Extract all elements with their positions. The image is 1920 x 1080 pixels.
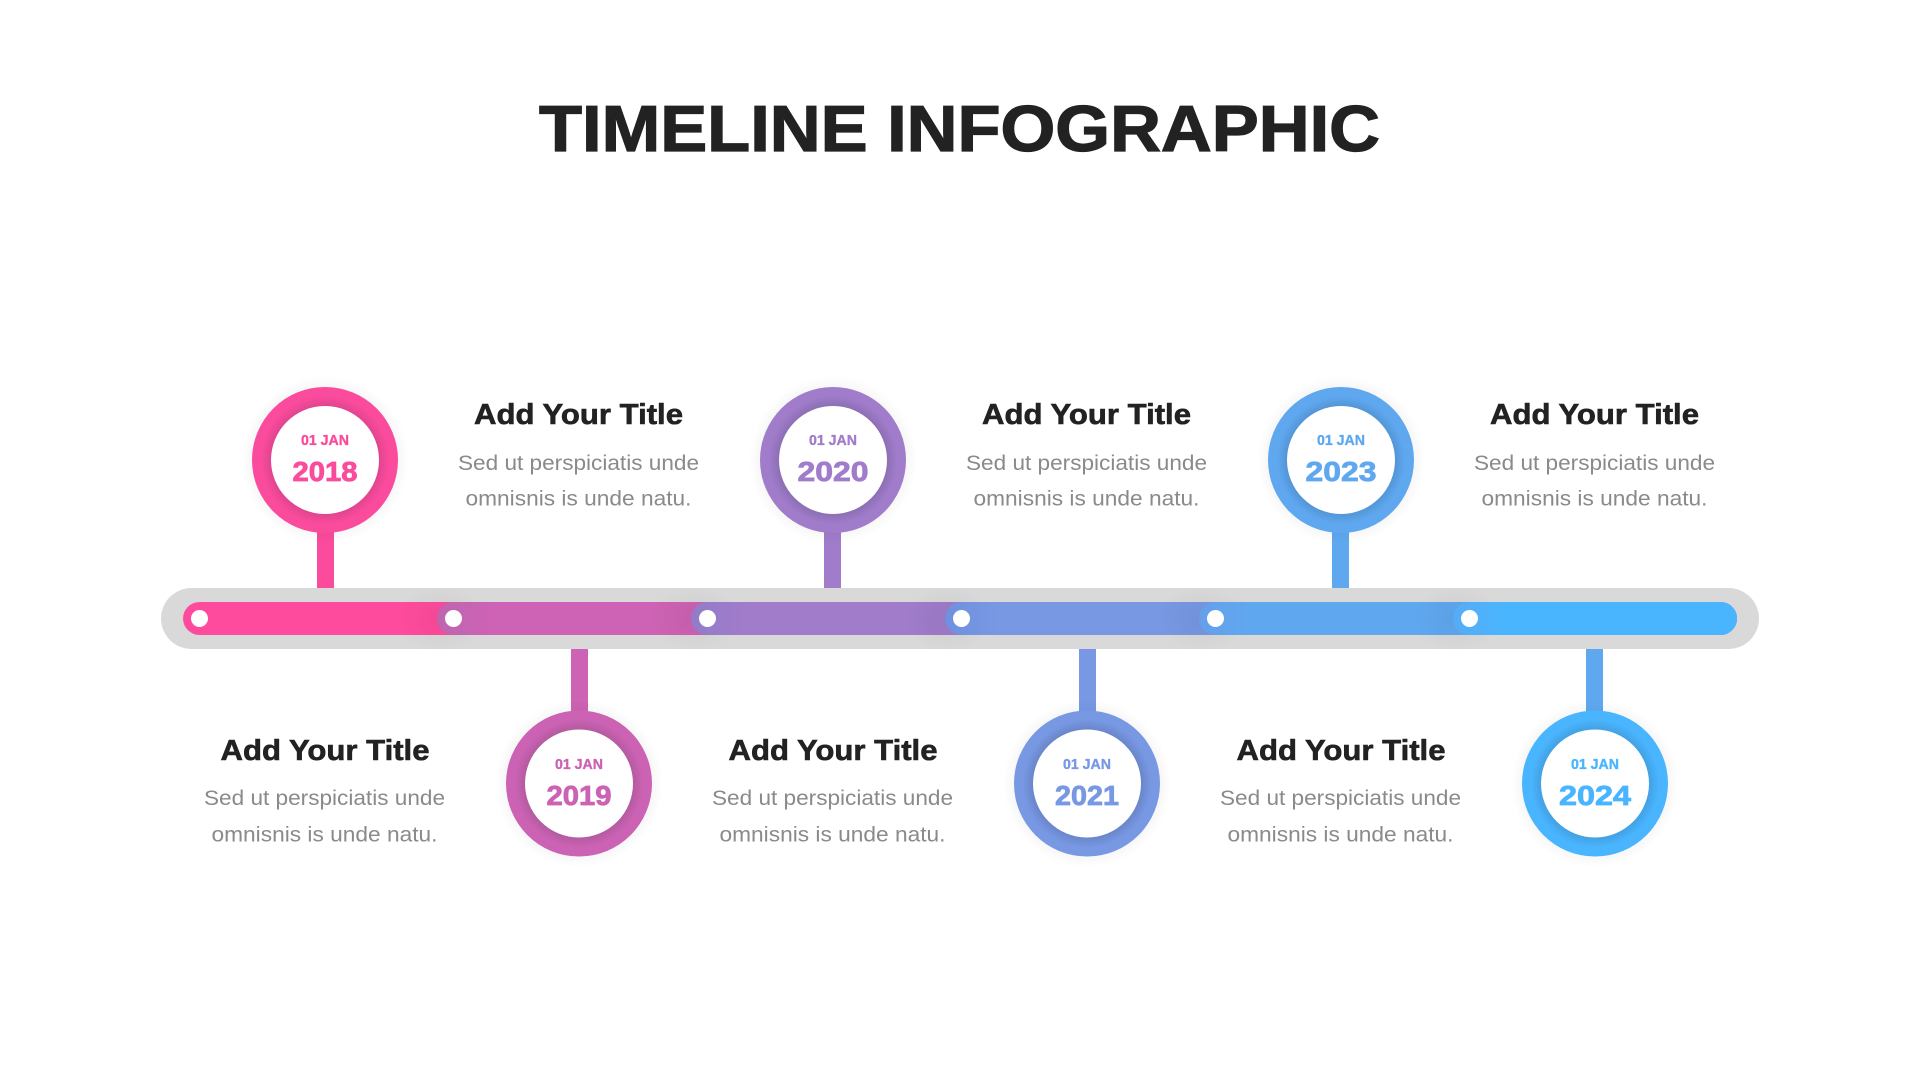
milestone 2023 text: Sed ut perspiciatis unde <box>1474 452 1715 475</box>
milestone 2020 badge: 2020 <box>798 456 868 487</box>
milestone 2019 badge: 01 JAN <box>555 757 603 773</box>
milestone 2020 text: Sed ut perspiciatis unde <box>966 452 1207 475</box>
title: TIMELINE INFOGRAPHIC <box>539 93 1380 165</box>
bar segment 5 <box>1199 602 1737 635</box>
milestone 2019 text: Sed ut perspiciatis unde <box>204 787 445 810</box>
milestone 2020 badge <box>749 376 917 544</box>
milestone 2023 text <box>1474 399 1715 510</box>
bar segment 1 <box>183 602 1737 635</box>
milestone 2020 badge: 01 JAN <box>809 433 857 449</box>
bar segment 6 <box>1453 602 1737 635</box>
milestone 2018 badge: 2018 <box>292 456 358 487</box>
milestone 2019 text: omnisnis is unde natu. <box>212 824 438 846</box>
milestone 2021 text: Sed ut perspiciatis unde <box>712 787 953 810</box>
milestone 2019 badge <box>495 700 663 868</box>
milestone 2024 badge: 2024 <box>1559 780 1631 811</box>
milestone 2018 text: omnisnis is unde natu. <box>466 488 692 510</box>
milestone 2024 text: omnisnis is unde natu. <box>1228 824 1454 846</box>
milestone 2019 text <box>204 735 445 846</box>
milestone 2021 badge: 2021 <box>1055 780 1119 811</box>
milestone 2023 badge: 2023 <box>1306 456 1376 487</box>
milestone 2021 text <box>712 735 953 846</box>
milestone 2021 text: omnisnis is unde natu. <box>720 824 946 846</box>
milestone 2019 text: Add Your Title <box>220 735 430 767</box>
milestone 2024 badge <box>1511 700 1679 868</box>
milestone 2018 badge: 01 JAN <box>301 433 349 449</box>
connector stems <box>317 530 1603 713</box>
milestone 2020 text: Add Your Title <box>982 399 1191 431</box>
milestone 2021 badge: 01 JAN <box>1063 757 1111 773</box>
bar dots <box>191 610 1478 627</box>
milestone 2021 text: Add Your Title <box>728 735 938 767</box>
milestone 2018 badge <box>241 376 409 544</box>
milestone 2018 text <box>458 399 699 510</box>
milestone 2023 badge <box>1257 376 1425 544</box>
milestone 2024 text: Add Your Title <box>1236 735 1446 767</box>
milestone 2020 text: omnisnis is unde natu. <box>974 488 1200 510</box>
bar segment 2 <box>437 602 1737 635</box>
milestone 2024 badge: 01 JAN <box>1571 757 1619 773</box>
bar segment 3 <box>691 602 1737 635</box>
milestone 2021 badge <box>1003 700 1171 868</box>
milestone 2023 text: Add Your Title <box>1490 399 1699 431</box>
milestone 2019 badge: 2019 <box>546 780 612 811</box>
bar segment 4 <box>945 602 1737 635</box>
milestone 2018 text: Sed ut perspiciatis unde <box>458 452 699 475</box>
milestone 2024 text: Sed ut perspiciatis unde <box>1220 787 1461 810</box>
timeline bar <box>161 588 1759 649</box>
milestone 2023 text: omnisnis is unde natu. <box>1482 488 1708 510</box>
milestone 2018 text: Add Your Title <box>474 399 683 431</box>
bar track <box>161 588 1759 649</box>
milestone 2024 text <box>1220 735 1461 846</box>
milestone 2023 badge: 01 JAN <box>1317 433 1365 449</box>
milestone 2020 text <box>966 399 1207 510</box>
